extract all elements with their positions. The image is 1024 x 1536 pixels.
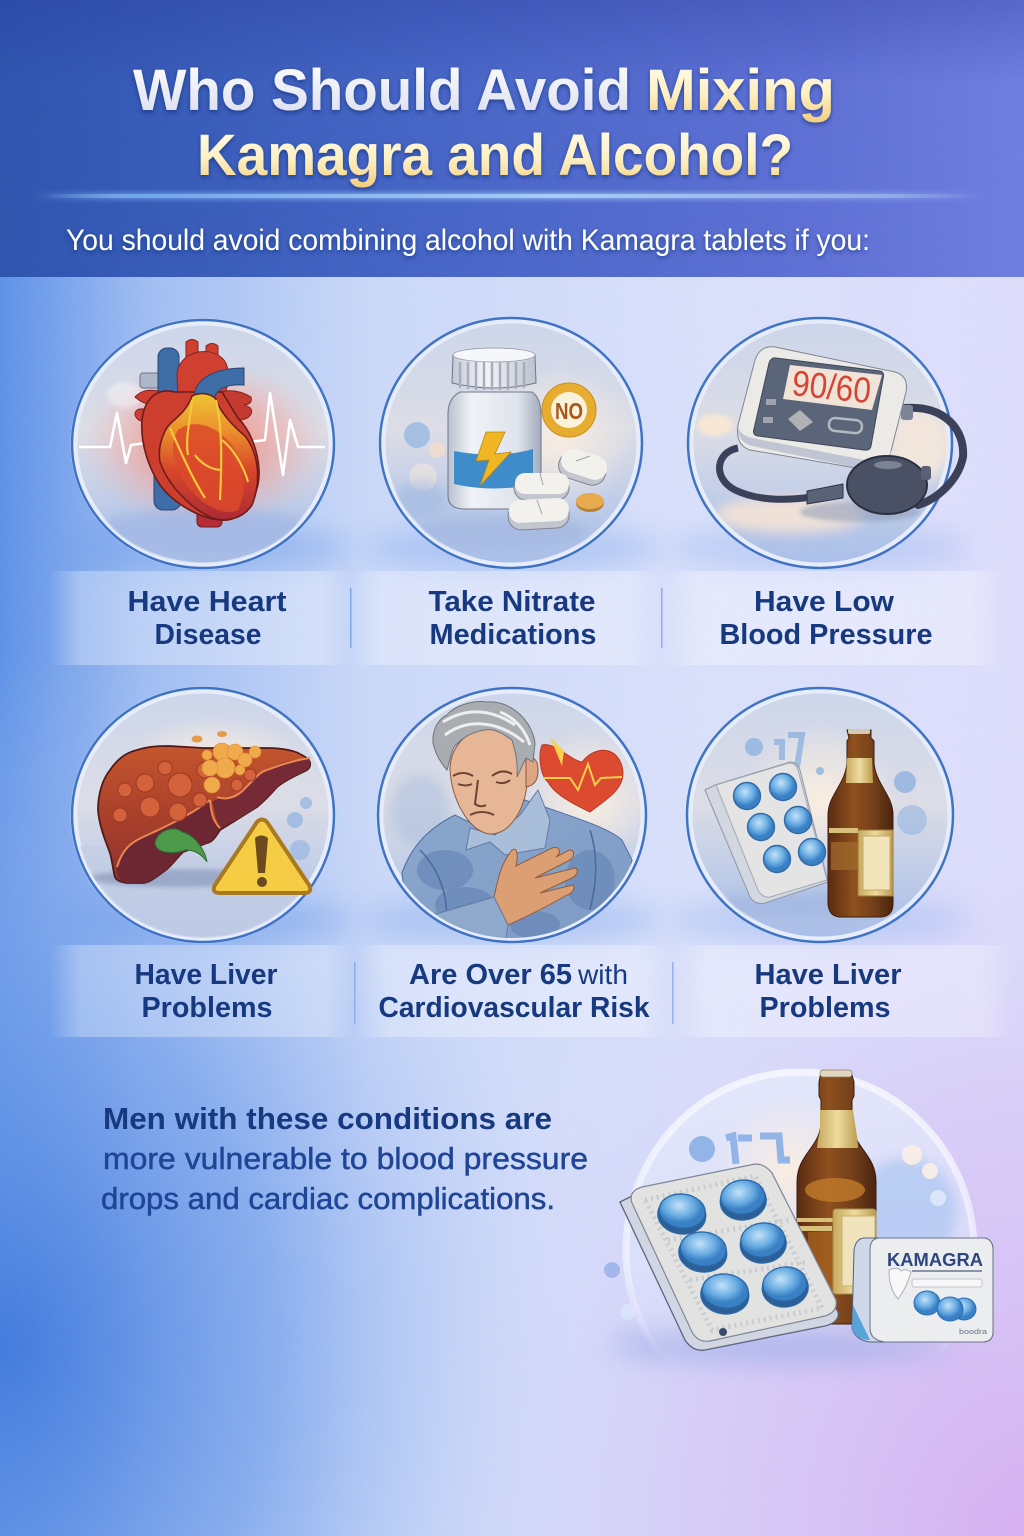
icon: heart with ECG line (72, 320, 334, 568)
icon: older man clutching chest (378, 688, 650, 945)
label: have liver problems (672, 945, 1014, 1037)
panel: take nitrate medications (350, 318, 661, 665)
backdrop circle (604, 1072, 974, 1428)
label: are over 65 with cardiovascular risk: Cardiovascular Risk (378, 992, 650, 1024)
label: have liver problems: Have Liver (134, 959, 278, 991)
label: are over 65 with cardiovascular risk: Are Over 65 (409, 959, 572, 991)
label: have liver problems: Problems (142, 992, 272, 1024)
panel: over 65 with cardiovascular risk (354, 688, 670, 1037)
panel: have low blood pressure (661, 318, 1003, 665)
icon: blood pressure monitor reading 90/60 (688, 318, 963, 568)
beer bottle (797, 1070, 876, 1324)
icon: blood pressure monitor reading 90/60: 90/60 (790, 362, 873, 411)
label: have low blood pressure (661, 571, 1003, 665)
panel: have liver problems (second) (670, 688, 1014, 1037)
Kamagra box: boodra (959, 1329, 987, 1336)
closing statement: more vulnerable to blood pressure (103, 1141, 588, 1176)
label: take nitrate medications (350, 571, 660, 665)
icon: blister pack and beer bottle (687, 688, 953, 942)
title: Mixing (646, 58, 835, 123)
icon: pill bottle with NO badge (380, 318, 642, 568)
closing statement: Men with these conditions are (103, 1101, 552, 1136)
label: have heart disease: Have Heart (128, 586, 287, 618)
Kamagra box (852, 1238, 993, 1342)
title: Kamagra and Alcohol? (197, 123, 793, 188)
icon: liver with warning triangle (72, 688, 334, 950)
subtitle: You should avoid combining alcohol with Kamagra tablets if you: (66, 224, 870, 257)
label: have liver problems: Problems (760, 992, 890, 1024)
panel: have liver problems (50, 688, 354, 1037)
illustration: blister pack, beer bottle and Kamagra box (604, 1070, 993, 1428)
label: have heart disease: Disease (154, 619, 262, 651)
Kamagra box: KAMAGRA (887, 1250, 983, 1270)
closing statement: drops and cardiac complications. (101, 1181, 555, 1216)
label: take nitrate medications: Take Nitrate (428, 586, 596, 618)
blister pack (620, 1164, 838, 1350)
title: Who Should Avoid (133, 58, 631, 123)
label: take nitrate medications: Medications (430, 619, 596, 651)
label: have heart disease (50, 571, 350, 665)
icon: pill bottle with NO badge: NO (555, 398, 583, 424)
label: have liver problems: Have Liver (754, 959, 902, 991)
label: are over 65 with cardiovascular risk (354, 945, 670, 1037)
panel: have heart disease (50, 320, 353, 665)
label: have low blood pressure: Blood Pressure (720, 619, 932, 651)
label: are over 65 with cardiovascular risk: with (577, 959, 628, 990)
header band (0, 0, 1024, 277)
label: have liver problems (50, 945, 354, 1037)
title (133, 58, 835, 188)
label: have low blood pressure: Have Low (754, 586, 894, 618)
closing statement (101, 1101, 588, 1216)
